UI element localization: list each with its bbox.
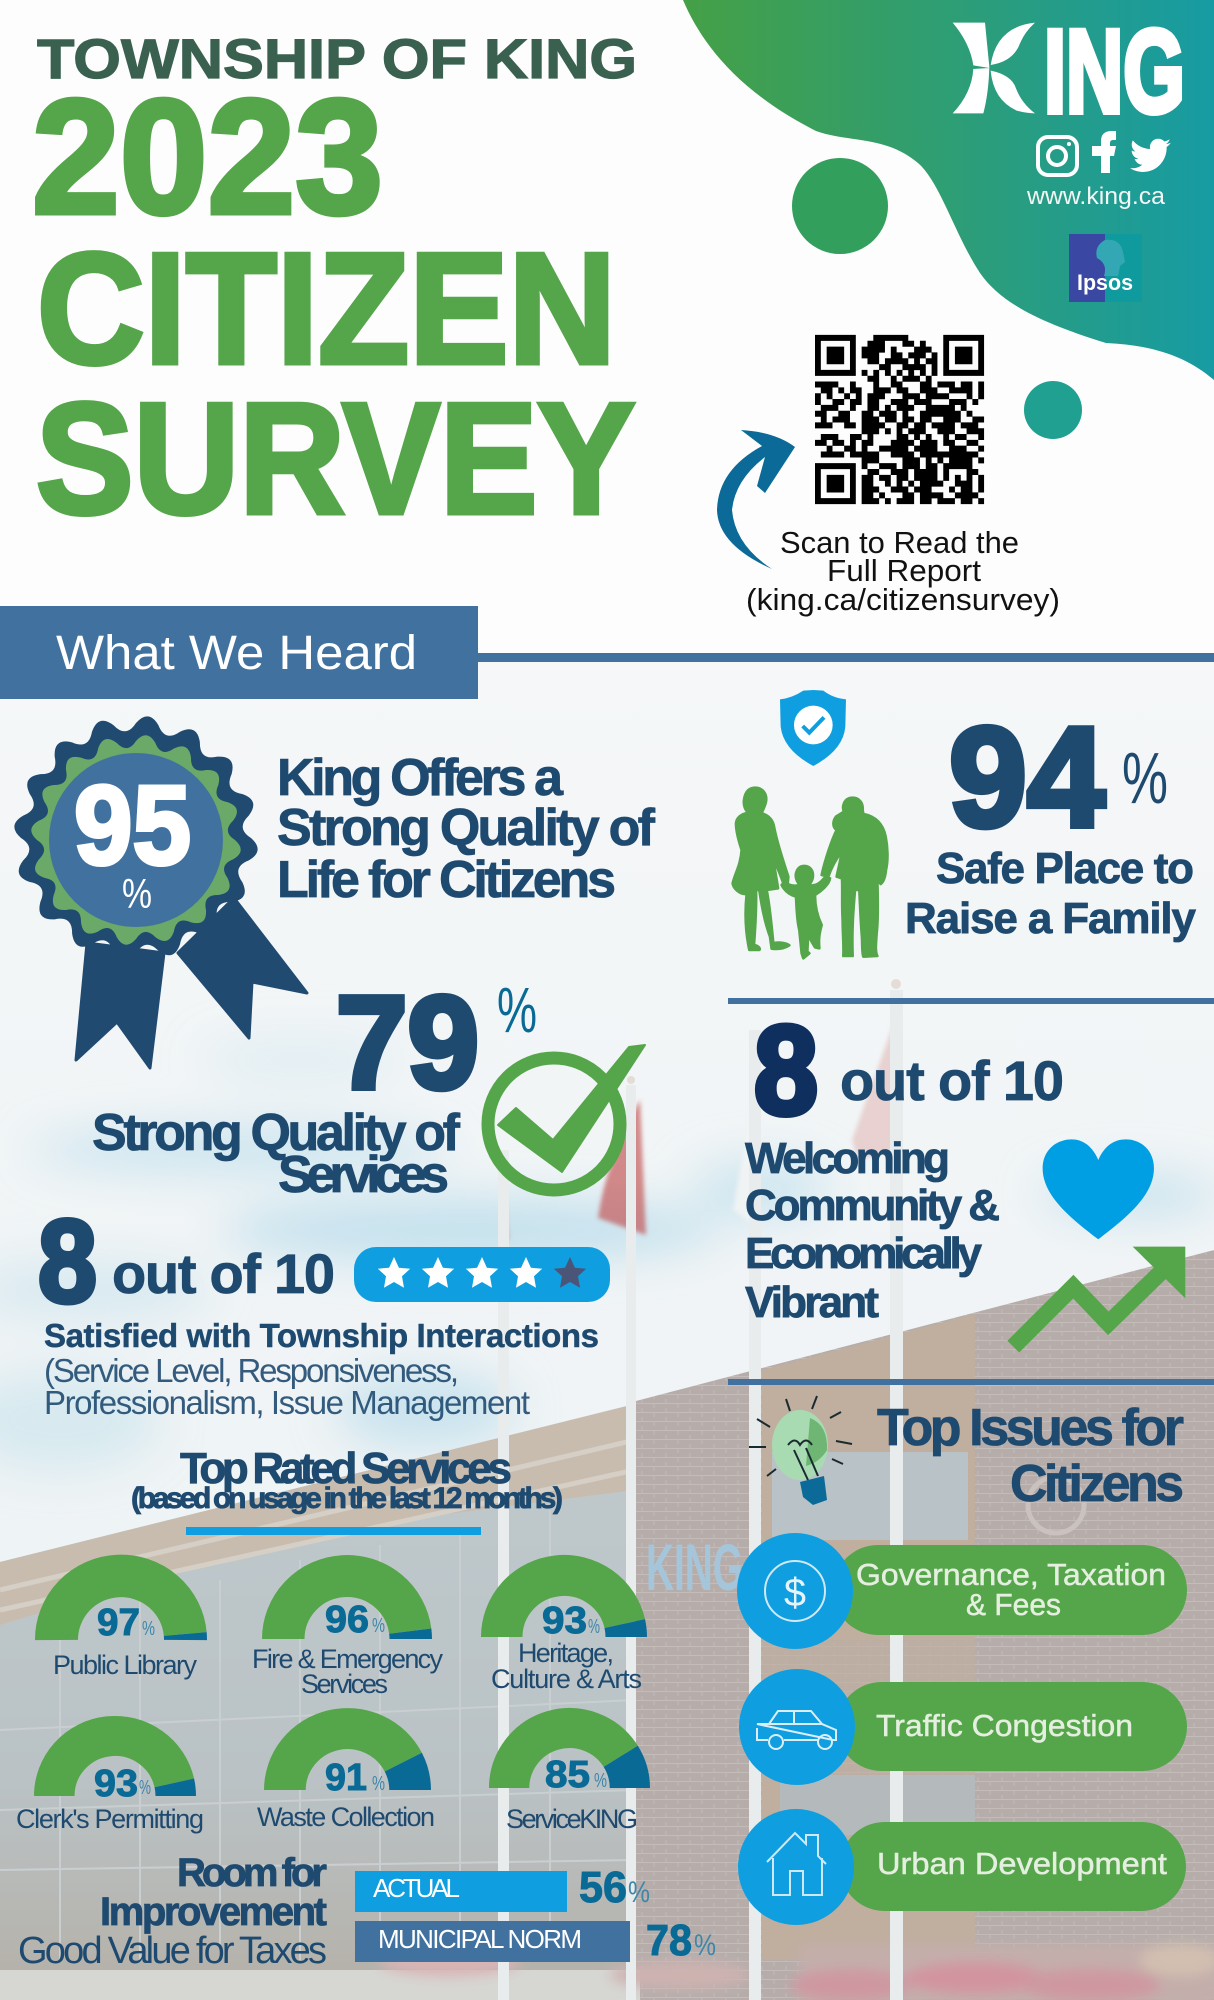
gauge: public library 97: %	[142, 1618, 155, 1640]
header: green gradient blob	[683, 0, 1214, 380]
gauge: public library 97	[53, 1576, 198, 1680]
ground and flowers	[0, 1970, 640, 2000]
section banner: what we heard	[0, 606, 1214, 699]
gauge: clerks permitting 93: 93	[94, 1763, 138, 1805]
left building	[0, 1404, 635, 1985]
panel: 94 percent safe place: %	[1122, 739, 1168, 819]
gauge: fire and emergency 96: Services	[301, 1669, 388, 1699]
panel: top rated services	[16, 1444, 642, 1834]
heading: top issues for citizens	[877, 1399, 1184, 1513]
bar: actual 56: 56	[579, 1863, 627, 1912]
building sign: KING	[646, 1530, 743, 1604]
stat: 95 percent: 95	[74, 763, 191, 888]
heading: welcoming community: Community &	[745, 1181, 1000, 1230]
heading: quality of life	[277, 749, 656, 909]
heading: safe place to raise a family	[905, 844, 1197, 943]
QR caption: (king.ca/citizensurvey)	[746, 582, 1060, 617]
flagpoles and flags	[493, 1020, 895, 1240]
issue: governance, taxation and fees	[737, 1533, 1187, 1649]
icon: family silhouette	[733, 788, 887, 958]
decorative circle: green	[792, 158, 888, 254]
social icons	[1038, 131, 1171, 175]
panel: 8 out of 10 township interactions	[38, 1196, 610, 1421]
icon: instagram	[1038, 137, 1077, 175]
heading: quality of services: Strong Quality of	[92, 1104, 461, 1162]
King logo	[953, 6, 1185, 138]
bar: municipal norm 78: MUNICIPAL NORM	[378, 1924, 582, 1954]
stat: 79 percent: 79	[336, 969, 479, 1116]
icon: green checkmark	[488, 1045, 645, 1190]
panel: 79 percent quality of services: %	[497, 974, 537, 1046]
bar: actual 56: ACTUAL	[373, 1873, 460, 1903]
text: interaction details	[44, 1352, 530, 1421]
icon: shield	[780, 690, 846, 766]
gauge: heritage culture arts 93: %	[588, 1616, 600, 1638]
icon: award ribbon	[14, 716, 307, 1068]
bar: actual 56	[355, 1863, 650, 1912]
decorative circle: teal	[1024, 381, 1082, 439]
panel: 79 percent quality of services	[92, 969, 645, 1204]
gauge: public library 97: 97	[97, 1602, 140, 1644]
panel: top issues for citizens	[737, 1396, 1187, 1925]
heading: quality of services: Services	[278, 1146, 449, 1204]
issue: traffic congestion	[739, 1669, 1187, 1785]
icon: twitter	[1130, 139, 1171, 172]
gauge: clerks permitting 93: Clerk's Permitting	[16, 1804, 204, 1834]
bar: actual 56: %	[628, 1876, 650, 1909]
gauge: serviceking 85	[506, 1728, 638, 1834]
bar: municipal norm 78: %	[694, 1929, 716, 1962]
gauge: fire and emergency 96: %	[372, 1615, 385, 1637]
icon: facebook	[1092, 131, 1116, 173]
gauge: waste collection 91: Waste Collection	[257, 1802, 435, 1832]
gauge: fire and emergency 96: 96	[325, 1599, 369, 1641]
issue: traffic congestion: Traffic Congestion	[876, 1708, 1133, 1743]
heading: welcoming community: Welcoming	[745, 1134, 950, 1183]
heading: top issues for citizens: Citizens	[1010, 1455, 1184, 1513]
heading: room for improvement	[100, 1851, 327, 1934]
gauge: heritage culture arts 93: Heritage,	[518, 1638, 614, 1668]
heading: welcoming community: Economically	[745, 1229, 983, 1278]
text: interaction details: Professionalism, Issue Management	[44, 1384, 530, 1421]
gauge: fire and emergency 96: Fire & Emergency	[252, 1644, 444, 1674]
heading: top rated services: (based on usage in the last 12 months)	[131, 1482, 563, 1515]
QR caption	[746, 525, 1060, 617]
stat: 94 percent: 94	[949, 698, 1105, 857]
text: satisfied with township interactions: Satisfied with Township Interactions	[44, 1317, 599, 1354]
background photo: township office with flags	[0, 660, 1214, 2000]
right building	[632, 1250, 1214, 2000]
heading: top issues for citizens: Top Issues for	[877, 1399, 1184, 1457]
issue: governance, taxation and fees: & Fees	[966, 1587, 1061, 1622]
gauge: waste collection 91	[257, 1729, 435, 1832]
bar: municipal norm 78	[355, 1916, 716, 1965]
text: good value for taxes: Good Value for Taxes	[18, 1930, 327, 1972]
website: www.king.ca	[1026, 183, 1166, 210]
QR code	[815, 338, 984, 501]
star rating pill	[354, 1247, 610, 1302]
heading: safe place to raise a family: Safe Place to	[936, 844, 1194, 893]
panel: 8 out of 10 welcoming community	[745, 1000, 1185, 1347]
gauge: serviceking 85: ServiceKING	[506, 1804, 638, 1834]
heading: top rated services	[131, 1444, 563, 1515]
bar: municipal norm 78: 78	[646, 1916, 692, 1965]
stat: 8 out of 10: 8	[754, 1000, 818, 1141]
Ipsos logo: Ipsos	[1077, 270, 1133, 295]
heading: room for improvement: Improvement	[100, 1890, 327, 1934]
panel: 94 percent safe place	[733, 690, 1197, 958]
heading: 2023: 2023	[32, 65, 383, 248]
arrow pointing to QR code	[717, 430, 795, 569]
gauge: heritage culture arts 93: 93	[542, 1600, 587, 1642]
QR caption: Scan to Read the	[780, 525, 1019, 560]
issue: governance, taxation and fees: $	[784, 1571, 806, 1615]
Ipsos logo	[1069, 234, 1142, 302]
heading: safe place to raise a family: Raise a Family	[905, 894, 1197, 943]
panel: 8 out of 10 welcoming community: out of 10	[840, 1049, 1064, 1112]
text: interaction details: (Service Level, Responsiveness,	[44, 1352, 459, 1389]
heading: quality of life: King Offers a	[277, 749, 564, 807]
heading: room for improvement: Room for	[177, 1851, 327, 1895]
gauge: public library 97: Public Library	[53, 1650, 198, 1680]
icon: heart	[1043, 1139, 1154, 1239]
heading: top rated services: Top Rated Services	[180, 1444, 512, 1493]
heading: survey: SURVEY	[36, 371, 635, 547]
gauge: waste collection 91: %	[372, 1773, 385, 1795]
issue: urban development: Urban Development	[877, 1846, 1167, 1881]
heading: welcoming community	[745, 1134, 1000, 1327]
gauge: clerks permitting 93	[16, 1736, 204, 1834]
heading: township of king: TOWNSHIP OF KING	[37, 27, 637, 90]
panel: 8 out of 10 township interactions: out of 10	[112, 1242, 335, 1305]
section banner: what we heard: What We Heard	[56, 627, 417, 680]
icon: lightbulb	[749, 1396, 852, 1505]
gauge: fire and emergency 96	[252, 1576, 444, 1699]
stat: 8 out of 10: 8	[38, 1196, 97, 1328]
gauge: waste collection 91: 91	[325, 1757, 367, 1799]
title block	[32, 27, 637, 547]
panel: room for improvement	[18, 1851, 716, 1972]
gauge: heritage culture arts 93	[491, 1575, 642, 1694]
gauge: clerks permitting 93: %	[139, 1777, 151, 1799]
heading: citizen: CITIZEN	[37, 221, 616, 397]
gauge: heritage culture arts 93: Culture & Arts	[491, 1664, 642, 1694]
gauge: serviceking 85: %	[594, 1770, 607, 1792]
heading: welcoming community: Vibrant	[745, 1278, 879, 1327]
panel: 95 percent quality of life: %	[122, 870, 152, 917]
heading: quality of life: Strong Quality of	[277, 799, 656, 857]
icon: growth arrow	[1013, 1247, 1185, 1347]
heading: quality of services	[92, 1104, 461, 1204]
QR caption: Full Report	[827, 553, 981, 588]
issue: urban development	[738, 1809, 1186, 1925]
heading: quality of life: Life for Citizens	[277, 851, 616, 909]
panel: 95 percent quality of life	[14, 716, 656, 1068]
issue: governance, taxation and fees: Governance, Taxation	[856, 1557, 1166, 1592]
gauge: serviceking 85: 85	[545, 1754, 590, 1796]
